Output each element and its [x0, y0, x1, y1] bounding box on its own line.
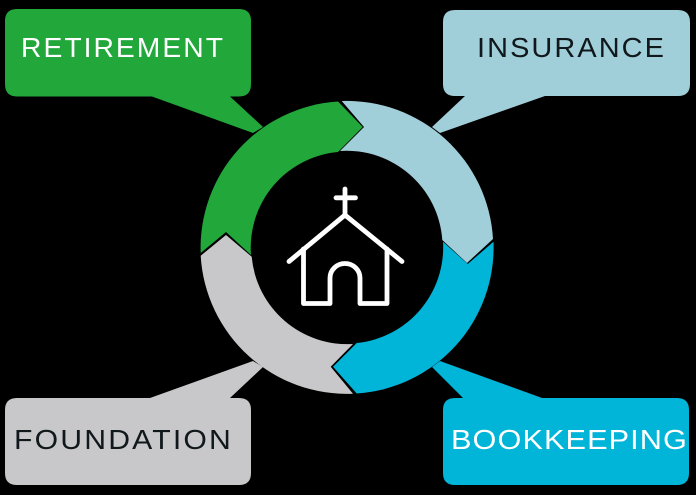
ring segment: bookkeeping — [333, 242, 494, 394]
callout: retirement: RETIREMENT — [21, 32, 225, 63]
ring segment: insurance — [340, 101, 493, 263]
callout: retirement — [5, 9, 263, 133]
ring segment: retirement — [201, 102, 363, 255]
callout: bookkeeping: BOOKKEEPING — [451, 424, 688, 455]
callout: insurance: INSURANCE — [477, 32, 666, 63]
callout: foundation: FOUNDATION — [14, 424, 233, 455]
callout: foundation — [5, 361, 263, 485]
callout: bookkeeping — [432, 361, 689, 485]
callout: insurance — [432, 10, 690, 133]
icon: church — [289, 189, 402, 304]
ring segment: foundation — [201, 235, 353, 394]
